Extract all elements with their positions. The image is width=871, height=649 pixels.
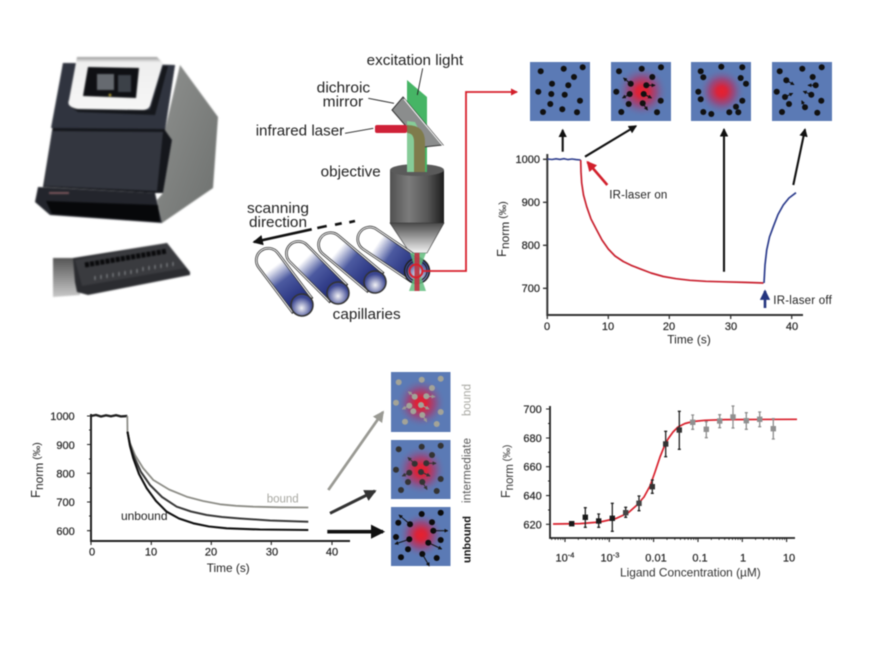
panel: bound molecules bbox=[391, 372, 450, 432]
instrument photo bbox=[35, 57, 218, 223]
y tick labels: 640 bbox=[523, 491, 542, 503]
arrow to intermediate panel bbox=[330, 491, 375, 513]
bezel shadow bbox=[69, 66, 168, 115]
y tick labels bbox=[523, 404, 542, 531]
x tick labels: 30 bbox=[266, 547, 278, 559]
silver bezel bbox=[68, 57, 163, 110]
label: mirror: mirror bbox=[323, 94, 363, 111]
y tick labels: 900 bbox=[56, 440, 75, 452]
y tick labels bbox=[50, 411, 75, 538]
IR-laser on arrow bbox=[588, 162, 607, 185]
x tick labels: 10 bbox=[145, 547, 157, 559]
y axis title: F bbox=[499, 490, 513, 498]
touch screen bbox=[83, 67, 139, 98]
capillary 2 bbox=[314, 228, 391, 298]
y tick labels: 800 bbox=[522, 240, 540, 252]
excitation beam bbox=[407, 80, 427, 172]
bound trace bbox=[127, 416, 308, 508]
x tick labels: 0.1 bbox=[692, 553, 708, 565]
intermediate trace bbox=[128, 432, 308, 522]
red detection circle bbox=[410, 264, 422, 278]
x tick labels: 10 bbox=[601, 553, 613, 565]
y axis title: F bbox=[494, 249, 509, 257]
arrow to unbound panel bbox=[327, 530, 383, 534]
fit curve bbox=[553, 419, 797, 524]
y axis title: (‰) bbox=[31, 442, 43, 463]
unbound data points bbox=[569, 411, 682, 531]
axes bbox=[91, 414, 350, 541]
optical schematic bbox=[247, 52, 517, 323]
unbound trace bbox=[128, 432, 308, 530]
x tick labels: 0 bbox=[89, 547, 95, 559]
scanning direction arrow bbox=[254, 221, 355, 242]
x tick labels: 10 bbox=[783, 553, 795, 565]
label: infrared laser: infrared laser bbox=[256, 123, 344, 140]
x tick labels: 30 bbox=[725, 321, 737, 333]
y axis title: norm bbox=[32, 463, 46, 490]
y tick labels: 600 bbox=[56, 526, 75, 538]
instrument side panel bbox=[157, 65, 218, 223]
y axis title: (‰) bbox=[502, 445, 513, 464]
x tick labels: 40 bbox=[786, 321, 798, 333]
infrared laser beam bbox=[375, 125, 425, 172]
bound data points bbox=[690, 406, 776, 439]
arrows from trace to panels bbox=[563, 126, 805, 272]
y tick labels: 700 bbox=[522, 283, 540, 295]
y tick labels: 900 bbox=[522, 197, 540, 209]
x tick labels bbox=[89, 547, 338, 559]
x tick labels: 10 bbox=[556, 553, 568, 565]
IR-laser off arrow bbox=[764, 291, 766, 308]
label: scanning: scanning bbox=[247, 200, 309, 217]
y tick labels: 700 bbox=[523, 404, 542, 416]
instrument base bbox=[35, 187, 162, 223]
x tick labels: 20 bbox=[205, 547, 217, 559]
label: excitation light: excitation light bbox=[367, 52, 464, 69]
emission beam lighter overlay bbox=[407, 121, 424, 172]
objective cone bbox=[390, 223, 444, 253]
chart: bound versus unbound traces bbox=[28, 411, 350, 575]
dichroic mirror bbox=[392, 97, 443, 147]
capillary tray photo bbox=[53, 243, 190, 297]
y tick labels: 1000 bbox=[516, 154, 540, 166]
panel: back diffusion bbox=[772, 62, 832, 121]
panel: steady state depletion bbox=[691, 62, 751, 121]
y tick labels: 680 bbox=[523, 433, 542, 445]
back-diffusion recovery bbox=[764, 193, 796, 283]
capillary 3 bbox=[281, 236, 354, 309]
thermophoresis decay bbox=[581, 160, 764, 283]
x axis title: Time (s) bbox=[667, 332, 711, 346]
x tick labels bbox=[556, 551, 795, 565]
y tick labels: 700 bbox=[56, 497, 75, 509]
signal arrow bbox=[423, 92, 517, 271]
panel: intermediate molecules bbox=[391, 440, 450, 499]
panel: molecules moving at laser on bbox=[611, 62, 671, 121]
leader lines bbox=[345, 68, 423, 133]
instrument brand mark bbox=[49, 192, 69, 194]
baseline before heating bbox=[91, 415, 127, 416]
x tick labels bbox=[544, 321, 798, 333]
label: direction: direction bbox=[249, 214, 307, 231]
arrow to bound panel bbox=[328, 412, 383, 490]
label: objective: objective bbox=[321, 164, 381, 181]
capillary 1 bbox=[353, 222, 434, 288]
x tick labels: 0 bbox=[544, 321, 550, 333]
IR-laser off label: IR-laser off bbox=[773, 295, 833, 307]
panel: molecules before heating bbox=[530, 62, 590, 121]
instrument door bbox=[44, 131, 163, 191]
chart: thermophoresis time trace bbox=[494, 154, 833, 346]
y axis title: F bbox=[28, 490, 43, 498]
x tick labels: 40 bbox=[326, 547, 338, 559]
unbound label: unbound bbox=[121, 509, 168, 523]
objective body bbox=[390, 170, 444, 223]
y tick labels: 620 bbox=[523, 519, 542, 531]
panel label: intermediate: intermediate bbox=[462, 438, 474, 503]
capillary 4 bbox=[251, 243, 318, 321]
y axis title: (‰) bbox=[497, 201, 509, 222]
x axis title: Time (s) bbox=[207, 561, 250, 575]
axes bbox=[547, 154, 803, 315]
instrument front upper panel bbox=[51, 63, 175, 129]
y tick labels: 800 bbox=[56, 468, 75, 480]
panel: unbound molecules bbox=[391, 507, 450, 566]
x tick labels: 10 bbox=[602, 321, 614, 333]
label: capillaries: capillaries bbox=[333, 306, 401, 323]
panel label: bound: bound bbox=[462, 384, 474, 416]
panel label: unbound: unbound bbox=[462, 516, 474, 563]
y tick labels: 660 bbox=[523, 462, 542, 474]
x tick labels: -4 bbox=[568, 551, 574, 560]
chart: binding curve bbox=[499, 404, 797, 580]
pre-heating baseline bbox=[547, 159, 581, 160]
x tick labels: 0.01 bbox=[645, 553, 667, 565]
IR-laser on label: IR-laser on bbox=[609, 189, 667, 201]
axes bbox=[550, 406, 795, 538]
label: dichroic: dichroic bbox=[317, 80, 371, 97]
y axis title: norm bbox=[504, 464, 516, 490]
focal light cone bbox=[409, 253, 426, 291]
y tick labels: 1000 bbox=[50, 411, 75, 423]
y axis title: norm bbox=[498, 222, 512, 249]
x tick labels: -3 bbox=[613, 551, 619, 560]
x tick labels: 1 bbox=[740, 553, 746, 565]
y tick labels bbox=[516, 154, 540, 295]
bound label: bound bbox=[267, 493, 299, 505]
x tick labels: 20 bbox=[663, 321, 675, 333]
x axis title: Ligand Concentration (µM) bbox=[620, 566, 761, 580]
instrument body backing bbox=[43, 63, 175, 193]
